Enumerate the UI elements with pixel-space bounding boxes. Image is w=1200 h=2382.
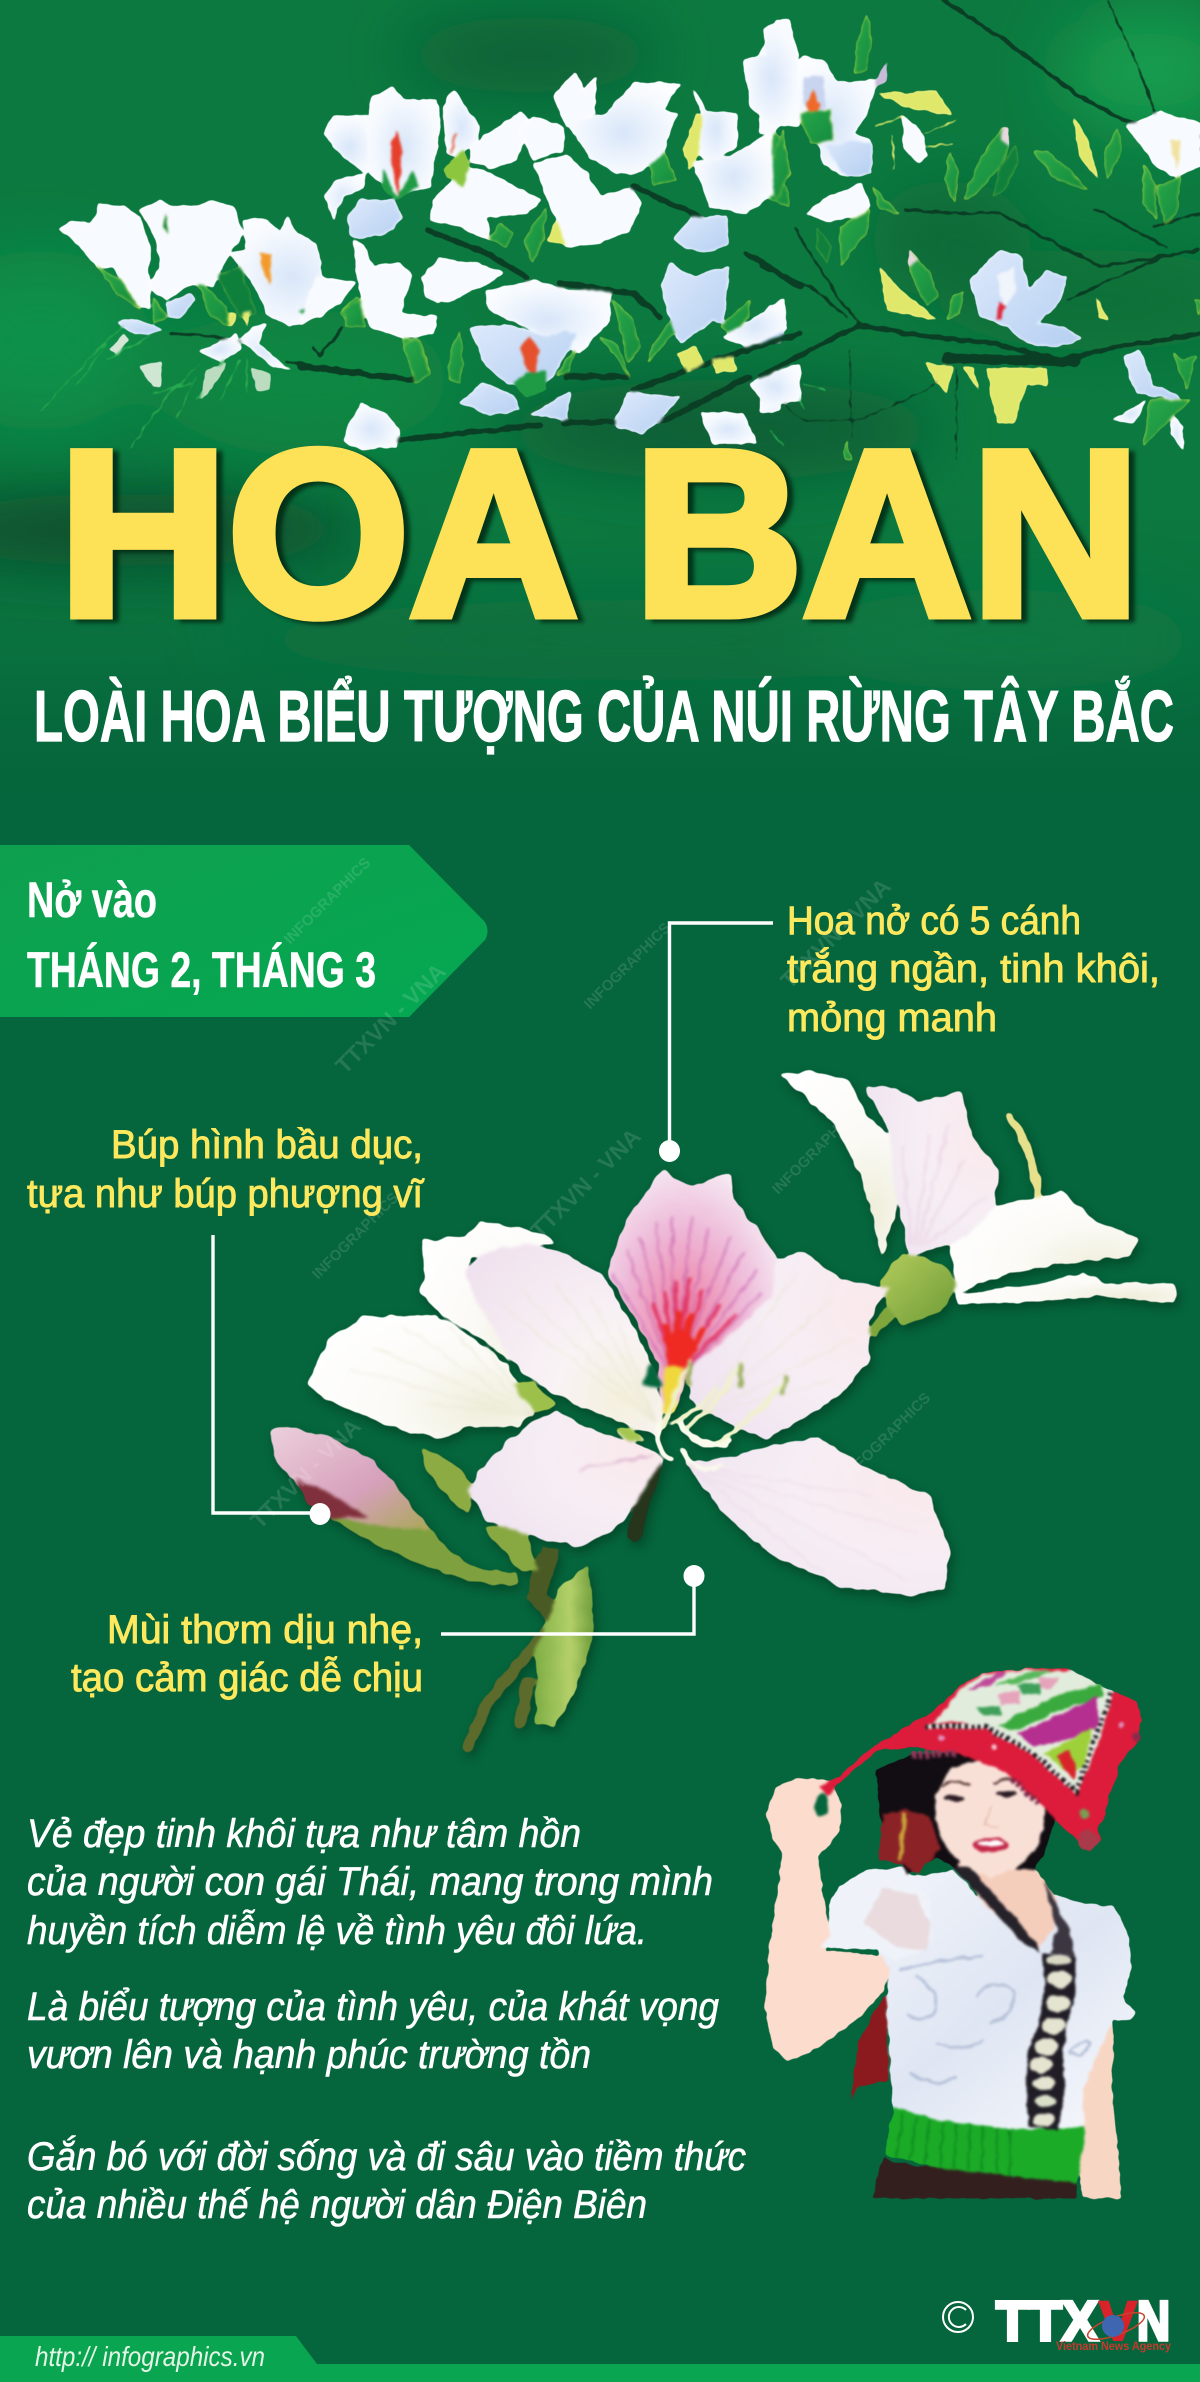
right branches, buds and flowers xyxy=(760,0,1200,460)
text block: meaning of the flower: Vẻ đẹp tinh khôi tựa như tâm hồn xyxy=(27,1812,581,1856)
centre strip with buttons xyxy=(1027,1953,1075,2130)
stamens xyxy=(663,1360,786,1443)
watermarks: TTXVN - VNA xyxy=(330,958,451,1079)
callout: five petals xyxy=(659,899,1160,1162)
copyright symbol xyxy=(943,2302,973,2332)
yellow hanging flowers xyxy=(927,363,953,393)
blue flower xyxy=(970,250,1082,347)
title: HOA BAN: HOA BAN xyxy=(59,402,1140,666)
footer bar with URL xyxy=(0,2336,1200,2382)
watermarks xyxy=(245,854,934,1534)
side bloom xyxy=(467,1072,1175,1747)
lower right flowers xyxy=(1123,350,1180,400)
logo: TTXVN: N xyxy=(1137,2289,1170,2352)
watermarks: INFOGRAPHICS xyxy=(581,919,674,1013)
text block: meaning of the flower: vươn lên và hạnh phúc trường tồn xyxy=(27,2033,591,2077)
banner: blooming season xyxy=(0,845,488,1017)
bud xyxy=(270,1427,518,1585)
logo: TTXVN: V xyxy=(1099,2289,1137,2352)
hair xyxy=(877,1753,1057,1880)
callout: five petals: mỏng manh xyxy=(787,996,997,1040)
watermarks: TTXVN - VNA xyxy=(525,1123,646,1244)
callout: bud shape xyxy=(27,1123,425,1525)
illustration: Thai woman in traditional dress xyxy=(765,1668,1142,2198)
logo: TTXVN: TTX xyxy=(996,2289,1098,2352)
callout: fragrance xyxy=(71,1565,704,1700)
stems xyxy=(467,1626,551,1747)
text block: meaning of the flower: của nhiều thế hệ người dân Điện Biên xyxy=(27,2183,647,2227)
banner: blooming season: THÁNG 2, THÁNG 3 xyxy=(27,942,376,998)
watermarks: TTXVN - VNA xyxy=(775,873,896,994)
footer bar with URL: http:// infographics.vn xyxy=(35,2341,265,2372)
raised arm and hand xyxy=(765,1778,932,2060)
header photo: blossoming branch xyxy=(40,0,1200,460)
scarf hanging behind xyxy=(850,1993,888,2105)
blouse xyxy=(820,1867,1135,2130)
callout: bud shape: tựa như búp phượng vĩ xyxy=(27,1172,425,1216)
right arm xyxy=(1073,2017,1122,2198)
text block: meaning of the flower: Là biểu tượng của tình yêu, của khát vọng xyxy=(27,1985,719,2029)
blouse collar straps xyxy=(953,1867,1040,1953)
watermarks: TTXVN - VNA xyxy=(245,1413,366,1534)
callout: five petals: trắng ngần, tinh khôi, xyxy=(787,946,1160,991)
scarf near shoulder xyxy=(878,1810,940,1873)
watermarks: INFOGRAPHICS xyxy=(841,1389,934,1483)
header photo background xyxy=(0,0,1200,710)
watermarks: INFOGRAPHICS xyxy=(309,1189,402,1283)
watermarks: INFOGRAPHICS xyxy=(769,1104,862,1198)
central flowers xyxy=(300,20,800,450)
text block: meaning of the flower xyxy=(27,1812,746,2227)
left flower cluster xyxy=(40,200,440,448)
banner: blooming season: Nở vào xyxy=(27,872,157,928)
main bloom xyxy=(308,1168,951,1595)
text block: meaning of the flower: của người con gái Thái, mang trong mình xyxy=(27,1860,713,1904)
top right flower xyxy=(1127,112,1200,177)
waist band xyxy=(885,2107,1085,2183)
watermarks: INFOGRAPHICS xyxy=(281,854,374,948)
headscarf xyxy=(820,1668,1142,1852)
flower illustration: open bloom, side bloom, bud, seed pod xyxy=(270,1072,1175,1747)
seed pod xyxy=(536,1562,593,1726)
callout: five petals: Hoa nở có 5 cánh xyxy=(787,899,1081,943)
callout: bud shape: Búp hình bầu dục, xyxy=(111,1123,423,1167)
logo: TTXVN xyxy=(996,2289,1171,2353)
top flower xyxy=(760,20,798,133)
neck and chest xyxy=(957,1863,1057,1950)
text block: meaning of the flower: Gắn bó với đời sống và đi sâu vào tiềm thức xyxy=(27,2134,746,2179)
face xyxy=(935,1761,1046,1878)
skirt xyxy=(872,2157,1077,2198)
callout: fragrance: tạo cảm giác dễ chịu xyxy=(71,1655,423,1700)
callout: fragrance: Mùi thơm dịu nhẹ, xyxy=(107,1608,423,1652)
text block: meaning of the flower: huyền tích diễm lệ về tình yêu đôi lứa. xyxy=(27,1908,647,1953)
logo: TTXVN: Vietnam News Agency xyxy=(1056,2339,1171,2353)
